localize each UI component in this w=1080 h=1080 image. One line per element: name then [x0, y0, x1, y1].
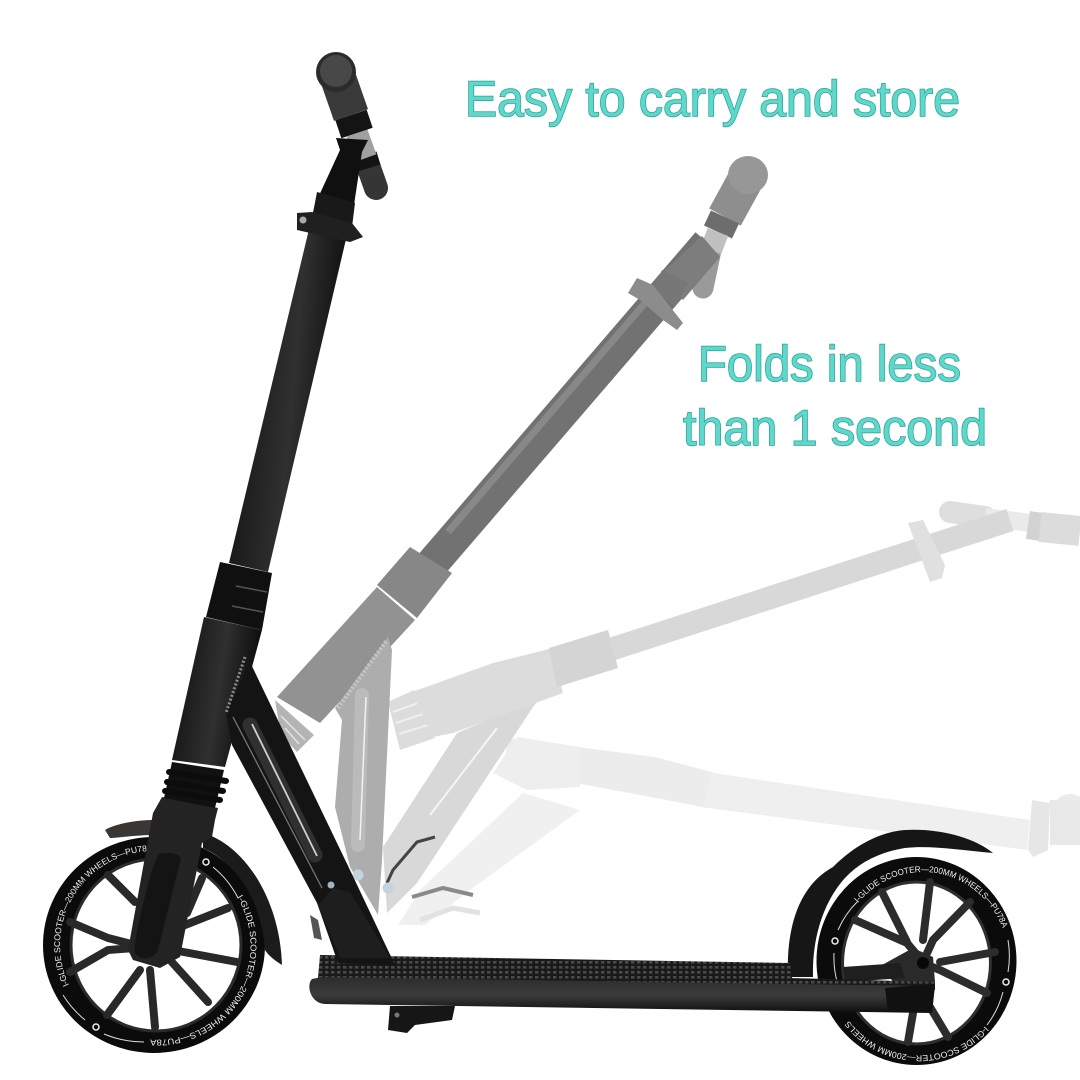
handlebar grips — [316, 52, 376, 188]
stem clamp — [297, 192, 363, 242]
heading: easy to carry and store: Easy to carry and store — [465, 71, 960, 127]
folded scooter ghost: lowest position — [398, 737, 1080, 925]
deck top with knurled grip — [318, 955, 935, 990]
lower stem tube — [172, 617, 262, 767]
front wheel lettering — [54, 846, 256, 1046]
deck body — [309, 977, 935, 1013]
caption: folds in less than 1 second: Folds in less — [698, 336, 961, 392]
handlebar post — [317, 138, 368, 205]
front wheel lettering: I-GLIDE SCOOTER—200MM WHEELS—PU78A — [150, 894, 256, 1046]
rear wheel spokes — [855, 882, 995, 1042]
caption: folds in less than 1 second — [683, 336, 987, 456]
front wheel — [43, 837, 265, 1053]
rear wheel — [816, 857, 1016, 1065]
front wheel lettering: I-GLIDE SCOOTER—200MM WHEELS—PU78 — [54, 846, 146, 987]
stem collar — [206, 562, 272, 630]
folded scooter ghost: upper position — [275, 156, 768, 915]
folded scooter ghost: middle position — [383, 512, 1080, 913]
upper stem tube — [229, 200, 354, 572]
front fender — [105, 820, 282, 965]
rear wheel lettering: I-GLIDE SCOOTER—200MM WHEELS — [845, 1022, 989, 1062]
rear wheel lettering — [831, 866, 1010, 1062]
caption: folds in less than 1 second: than 1 second — [683, 400, 987, 456]
front fork — [128, 797, 218, 968]
kickstand pedal — [388, 1006, 455, 1033]
rear wheel lettering: I-GLIDE SCOOTER—200MM WHEELS—PU78A — [854, 866, 1008, 928]
rear deck end cap — [885, 984, 935, 1012]
frame strut — [226, 657, 395, 965]
front wheel spokes — [70, 875, 237, 1027]
spring — [164, 762, 226, 808]
rear axle bracket — [843, 948, 935, 982]
rear fender — [788, 830, 993, 977]
